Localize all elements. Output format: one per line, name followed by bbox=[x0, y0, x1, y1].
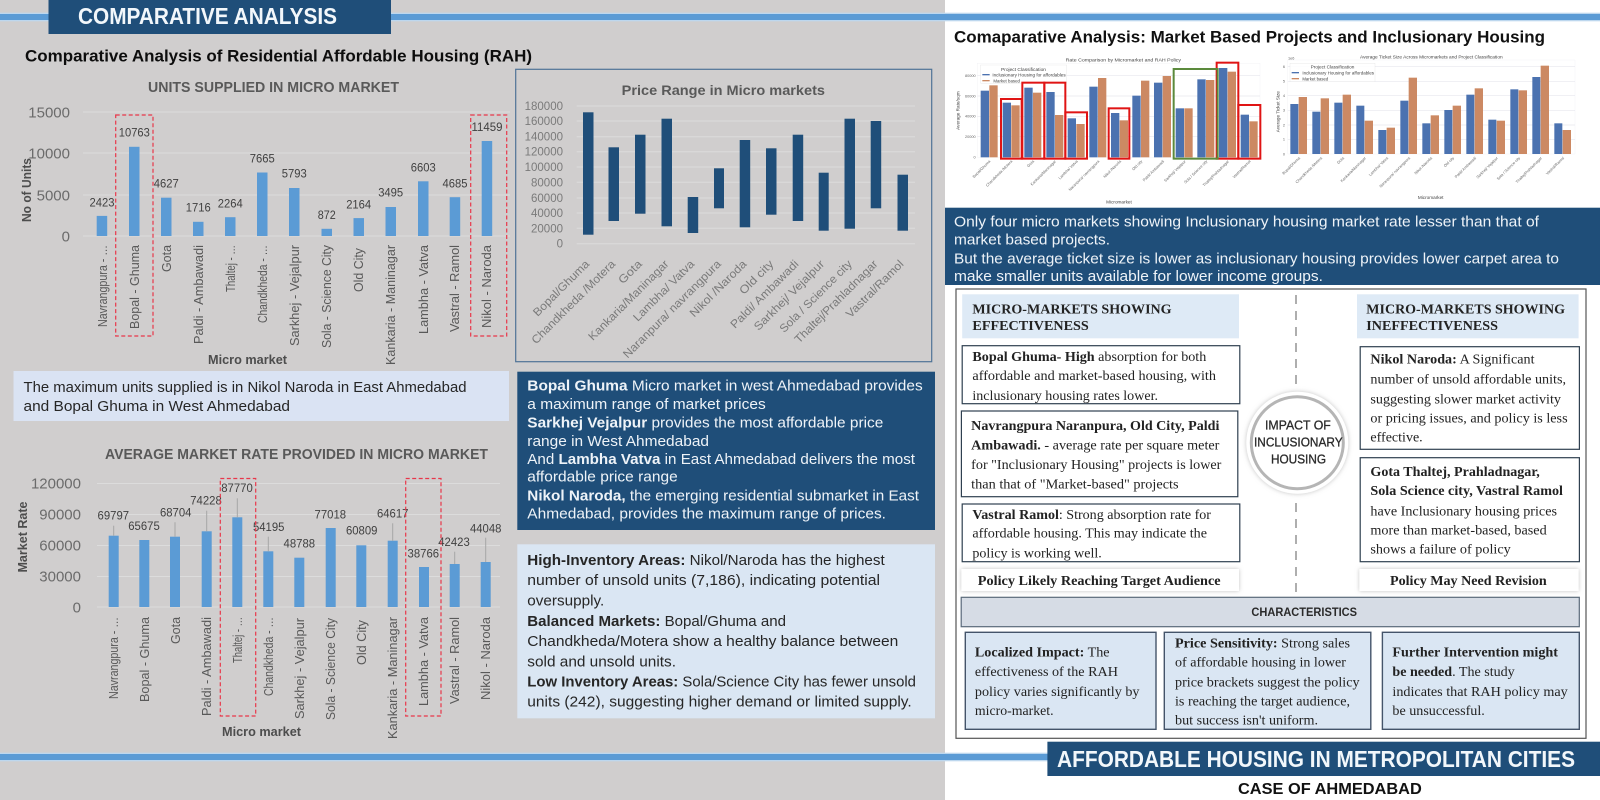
text box: Bopal Ghuma bbox=[962, 346, 1240, 404]
panel: price range chart: 0 bbox=[557, 239, 563, 251]
bar chart: units supplied in micro market: 1716 bbox=[186, 202, 211, 214]
bar chart: average market rate: Paldi - Ambawadi bbox=[200, 617, 214, 716]
heading: ineffectiveness: INEFFECTIVENESS bbox=[1366, 318, 1498, 333]
heading: effectiveness: EFFECTIVENESS bbox=[972, 318, 1089, 333]
card: further intervention bbox=[1382, 632, 1579, 729]
chart: rate comparison by micromarket: 0 bbox=[974, 156, 976, 160]
panel: price range findings: Bopal Ghuma Micro market in west Ahmedabad provides bbox=[527, 378, 923, 394]
bar chart: units supplied in micro market: 6603 bbox=[411, 162, 436, 174]
chart: rate comparison by micromarket: 40000 bbox=[965, 115, 976, 119]
chart: average ticket size: Market based bbox=[1302, 76, 1329, 81]
panel: price range chart: Sarkhej/ Vejalpur bbox=[752, 258, 827, 333]
chart: average ticket size: 4 bbox=[1283, 94, 1286, 98]
panel: inventory findings: sold and unsold units. bbox=[527, 654, 676, 670]
bar chart: average market rate: 48788 bbox=[284, 538, 315, 550]
bar chart: average market rate: 74228 bbox=[190, 496, 222, 508]
chart: rate comparison by micromarket: Average Rate/sqm bbox=[955, 91, 960, 130]
panel: price range findings: Nikol Naroda, the emerging residential submarket in East bbox=[527, 489, 919, 505]
text box: Nikol Naroda bbox=[1360, 347, 1579, 449]
panel: market based vs inclusionary summary: market based projects. bbox=[954, 232, 1110, 248]
bar chart: units supplied in micro market: 872 bbox=[318, 210, 336, 222]
card: price sensitivity: but success isn't uniform. bbox=[1175, 712, 1318, 727]
bar chart: average market rate: 30000 bbox=[39, 568, 81, 586]
bar chart: average market rate: 65675 bbox=[128, 521, 160, 533]
heading: effectiveness bbox=[962, 294, 1239, 338]
chart: rate comparison by micromarket: 20000 bbox=[965, 135, 976, 139]
chart: rate comparison by micromarket: Lambha/ Vatva bbox=[1058, 159, 1079, 180]
bar chart: average market rate: 90000 bbox=[39, 506, 81, 524]
bar chart: units supplied in micro market: No of Units bbox=[20, 158, 34, 222]
card: price sensitivity: Price Sensitivity: Strong sales bbox=[1175, 635, 1350, 650]
panel: inventory findings: High-Inventory Areas: Nikol/Naroda has the highest bbox=[527, 553, 885, 569]
chart: rate comparison by micromarket: Project Classification bbox=[1001, 67, 1046, 72]
panel: price range chart: Lambha/ Vatva bbox=[631, 258, 698, 324]
panel: price range chart: 40000 bbox=[531, 208, 563, 220]
bar chart: average market rate: 38766 bbox=[408, 549, 439, 561]
bar chart: units supplied in micro market: Old City bbox=[352, 247, 366, 292]
chart: average ticket size: 6 bbox=[1283, 65, 1285, 69]
card: further intervention: be unsuccessful. bbox=[1392, 703, 1485, 718]
bar chart: units supplied in micro market: Lambha - Vatva bbox=[417, 245, 431, 334]
bar chart: units supplied in micro market: 5000 bbox=[37, 188, 70, 204]
bar chart: units supplied in micro market: Paldi - Ambawadi bbox=[192, 245, 206, 344]
chart: rate comparison by micromarket: Naranpura/ navrangpura bbox=[1068, 159, 1101, 192]
card: price sensitivity bbox=[1164, 632, 1371, 729]
chart: rate comparison by micromarket: Old city bbox=[1132, 159, 1143, 171]
panel: inventory findings bbox=[517, 544, 935, 718]
panel: price range chart: 20000 bbox=[531, 223, 563, 235]
chart: rate comparison by micromarket: Market based bbox=[993, 78, 1020, 83]
bar chart: average market rate: Vastral - Ramol bbox=[448, 617, 462, 704]
text box: Bopal Ghuma: affordable and market-based housing, with bbox=[972, 368, 1216, 383]
center circle: impact of inclusionary housing: IMPACT OF bbox=[1265, 417, 1331, 432]
panel: price range chart: Kankaria/Maninagar bbox=[587, 258, 672, 343]
card: price sensitivity: price brackets suggest the policy bbox=[1175, 675, 1360, 690]
bar chart: units supplied in micro market: 4627 bbox=[154, 178, 179, 190]
panel: price range chart: 180000 bbox=[525, 101, 563, 113]
text box: Gota Thaltej: Sola Science city, Vastral Ramol bbox=[1370, 483, 1563, 498]
bar chart: units supplied in micro market: 4685 bbox=[442, 178, 468, 190]
footer subtitle: CASE OF AHMEDABAD bbox=[1238, 781, 1422, 798]
panel: inventory findings: number of unsold units (7,186), indicating potential bbox=[527, 573, 880, 589]
chart: average ticket size: Gota bbox=[1336, 156, 1346, 165]
bar chart: units supplied in micro market: 11459 bbox=[472, 122, 502, 134]
panel: price range chart: Paldi/ Ambawadi bbox=[729, 258, 801, 331]
text box: Navrangpura Naranpura: for "Inclusionary Housing" projects is lower bbox=[971, 457, 1222, 472]
text box: Vastral Ramol: policy is working well. bbox=[972, 546, 1102, 561]
bar chart: average market rate: Lambha - Vatva bbox=[417, 617, 431, 706]
chart: rate comparison by micromarket: Micromarket bbox=[1106, 199, 1133, 204]
text box: Navrangpura Naranpura: than that of "Market-based" projects bbox=[971, 476, 1179, 491]
bar chart: average market rate: Kankaria - Maninagar bbox=[386, 617, 400, 739]
bar chart: average market rate: Navrangpura - … bbox=[107, 617, 121, 699]
text box: Navrangpura Naranpura bbox=[961, 411, 1238, 497]
panel: price range chart: Naranpura/ navrangpura bbox=[621, 258, 724, 361]
chart: average ticket size: Bopal/Ghuma bbox=[1282, 156, 1302, 176]
bar chart: units supplied in micro market: Bopal - Ghuma bbox=[128, 245, 142, 329]
bar chart: average market rate bbox=[16, 447, 501, 739]
panel: price range findings bbox=[517, 372, 935, 530]
panel: inventory findings: Chandkheda/Motera show a healthy balance between bbox=[527, 634, 898, 650]
chart: average ticket size bbox=[1275, 55, 1575, 200]
card: further intervention: Further Intervention might bbox=[1392, 645, 1559, 660]
panel: price range chart: Gota bbox=[617, 258, 645, 287]
text box: Navrangpura Naranpura: Navrangpura Naranpura, Old City, Paldi bbox=[971, 418, 1220, 433]
panel: price range chart: Bopal/Ghuma bbox=[531, 258, 593, 319]
heading bar: characteristics bbox=[961, 597, 1579, 627]
chart: rate comparison by micromarket: Vastral/Ramol bbox=[1232, 159, 1252, 179]
panel: market based vs inclusionary summary bbox=[945, 208, 1600, 285]
chart: average ticket size: Average Ticket Size Across Micromarkets and Project Classification bbox=[1360, 55, 1503, 60]
bar chart: units supplied in micro market: Vastral - Ramol bbox=[448, 245, 462, 332]
text box: Nikol Naroda: Nikol Naroda: A Significant bbox=[1370, 352, 1535, 367]
text box: Gota Thaltej: more than market-based, based bbox=[1370, 522, 1547, 537]
panel: inventory findings: oversupply. bbox=[527, 593, 604, 609]
text box: Gota Thaltej: Gota Thaltej, Prahladnagar, bbox=[1370, 464, 1540, 479]
panel: price range chart: Old city bbox=[738, 258, 777, 297]
bar chart: average market rate: AVERAGE MARKET RATE PROVIDED IN MICRO MARKET bbox=[105, 447, 488, 463]
panel: price range findings: Sarkhej Vejalpur provides the most affordable price bbox=[527, 416, 883, 432]
panel: price range chart: 140000 bbox=[525, 132, 563, 144]
bar chart: units supplied in micro market: 2164 bbox=[346, 199, 372, 211]
panel: price range chart: 120000 bbox=[525, 147, 563, 159]
bar chart: average market rate: 60809 bbox=[346, 525, 377, 537]
card: price sensitivity: is reaching the target audience, bbox=[1175, 694, 1350, 709]
panel: price range chart: 160000 bbox=[525, 116, 563, 128]
callout: maximum units supplied: and Bopal Ghuma in West Ahmedabad bbox=[24, 399, 290, 415]
text box: Nikol Naroda: suggesting slower market activity bbox=[1370, 391, 1561, 406]
chart: average ticket size: Average Ticket Size bbox=[1275, 91, 1280, 132]
heading: effectiveness: MICRO-MARKETS SHOWING bbox=[972, 301, 1172, 316]
chart: average ticket size: Sarkhej/ Vejalpur bbox=[1476, 156, 1500, 180]
label: policy likely reaching target audience bbox=[961, 569, 1239, 591]
chart: rate comparison by micromarket: Nikol /Naroda bbox=[1103, 159, 1123, 179]
bar chart: average market rate: 60000 bbox=[39, 538, 81, 554]
panel: inventory findings: Low Inventory Areas: Sola/Science City has fewer unsold bbox=[527, 675, 916, 691]
right heading: Comaparative Analysis: Market Based Projects and Inclusionary Housing bbox=[954, 28, 1545, 46]
card: localized impact: Localized Impact: The bbox=[975, 645, 1110, 660]
bar chart: units supplied in micro market: Sola - Science City bbox=[320, 244, 334, 348]
bar chart: average market rate: Thaltej - … bbox=[231, 617, 245, 663]
card: further intervention: indicates that RAH policy may bbox=[1392, 684, 1568, 699]
bar chart: average market rate: 44048 bbox=[470, 523, 501, 535]
heading bar: characteristics: CHARACTERISTICS bbox=[1251, 605, 1357, 619]
label: policy may need revision: Policy May Need Revision bbox=[1390, 573, 1547, 588]
bar chart: units supplied in micro market: 2423 bbox=[90, 197, 114, 209]
panel: price range chart bbox=[516, 69, 932, 362]
chart: average ticket size: Micromarket bbox=[1418, 195, 1444, 200]
card: localized impact bbox=[965, 632, 1156, 729]
bar chart: units supplied in micro market: 2264 bbox=[218, 198, 243, 210]
bar chart: average market rate: Old City bbox=[355, 619, 369, 665]
panel: inventory findings: units (242), suggesting higher demand or limited supply. bbox=[527, 695, 912, 711]
bar chart: average market rate: 69797 bbox=[98, 511, 129, 523]
panel: market based vs inclusionary summary: make smaller units available for lower income groups. bbox=[954, 269, 1323, 285]
bar chart: average market rate: 77018 bbox=[315, 510, 346, 522]
bar chart: units supplied in micro market: Gota bbox=[160, 245, 174, 272]
chart: average ticket size: 3 bbox=[1283, 109, 1285, 113]
text box: Gota Thaltej: have Inclusionary housing prices bbox=[1370, 504, 1557, 519]
callout: maximum units supplied: The maximum units supplied is in Nikol Naroda in East Ahmedabad bbox=[24, 380, 466, 396]
card: price sensitivity: of affordable housing in lower bbox=[1175, 655, 1347, 670]
chart: rate comparison by micromarket: Sola / Science city bbox=[1183, 159, 1208, 184]
bar chart: average market rate: Nikol - Naroda bbox=[479, 617, 493, 700]
panel: market based vs inclusionary summary: Only four micro markets showing Inclusionary housing market rate lesser than that of bbox=[954, 215, 1540, 231]
text box: Nikol Naroda: or pricing issues, and policy is less bbox=[1370, 410, 1568, 425]
bar chart: average market rate: Market Rate bbox=[16, 501, 30, 572]
card: localized impact: micro-market. bbox=[975, 703, 1054, 718]
panel: inventory findings: Balanced Markets: Bopal/Ghuma and bbox=[527, 614, 786, 630]
panel: price range findings: And Lambha Vatva in East Ahmedabad delivers the most bbox=[527, 452, 915, 468]
bar chart: units supplied in micro market: Sarkhej - Vejalpur bbox=[288, 245, 302, 346]
panel: price range chart: 100000 bbox=[525, 162, 563, 174]
bar chart: units supplied in micro market: Navrangpura - … bbox=[96, 245, 110, 327]
panel: price range chart: Thaltej/Prahladnagar bbox=[793, 258, 881, 346]
chart: average ticket size: 1 bbox=[1283, 138, 1285, 142]
panel: price range chart: Nikol /Naroda bbox=[688, 258, 750, 320]
panel: price range chart: Price Range in Micro markets bbox=[622, 82, 825, 98]
bar chart: units supplied in micro market bbox=[20, 80, 510, 367]
top rule bbox=[0, 13, 1600, 21]
bar chart: average market rate: Micro market bbox=[222, 725, 302, 739]
chart: rate comparison by micromarket: Inclusionary Housing for affordables bbox=[992, 73, 1066, 78]
callout: maximum units supplied bbox=[14, 371, 509, 421]
panel: market based vs inclusionary summary: But the average ticket size is lower as inclusionary housing provides lower carpet area to bbox=[954, 251, 1559, 267]
panel: price range chart: 60000 bbox=[531, 193, 563, 205]
chart: average ticket size: Chandkheda /Motera bbox=[1295, 156, 1324, 184]
text box: Bopal Ghuma: inclusionary housing rates lower. bbox=[972, 388, 1158, 403]
bar chart: units supplied in micro market: 15000 bbox=[28, 104, 70, 122]
center circle: impact of inclusionary housing: HOUSING bbox=[1271, 451, 1326, 466]
text box: Navrangpura Naranpura: Ambawadi. - average rate per square meter bbox=[971, 437, 1220, 452]
chart: average ticket size: Vastral/Ramol bbox=[1545, 156, 1565, 176]
label: policy likely reaching target audience: Policy Likely Reaching Target Audience bbox=[978, 573, 1221, 588]
chart: average ticket size: 5 bbox=[1283, 80, 1285, 84]
bar chart: units supplied in micro market: Chandkheda - … bbox=[256, 245, 270, 323]
chart: rate comparison by micromarket: Kankaria/Maninagar bbox=[1030, 159, 1058, 187]
chart: rate comparison by micromarket: Gota bbox=[1026, 159, 1036, 168]
bar chart: units supplied in micro market: Kankaria - Maninagar bbox=[384, 245, 398, 365]
heading: ineffectiveness bbox=[1357, 294, 1579, 338]
panel: price range findings: range in West Ahmedabad bbox=[527, 434, 709, 450]
bar chart: average market rate: Sarkhej - Vejalpur bbox=[293, 618, 307, 719]
chart: rate comparison by micromarket: Paldi/ Ambawadi bbox=[1142, 159, 1165, 182]
center circle: impact of inclusionary housing: INCLUSIONARY bbox=[1254, 435, 1343, 450]
bar chart: average market rate: 0 bbox=[73, 600, 81, 616]
bar chart: units supplied in micro market: Thaltej - … bbox=[224, 245, 238, 292]
bar chart: average market rate: Sola - Science City bbox=[324, 617, 338, 720]
chart: average ticket size: Old city bbox=[1443, 156, 1455, 168]
bar chart: units supplied in micro market: 3495 bbox=[378, 188, 403, 200]
panel: price range chart: 80000 bbox=[531, 177, 563, 189]
section banner: comparative analysis bbox=[48, 0, 391, 34]
panel: price range chart: Chandkheda /Motera bbox=[530, 258, 619, 347]
chart: rate comparison by micromarket: Rate Comparison by Micromarket and RAH Policy bbox=[1066, 57, 1182, 62]
chart: average ticket size: 1e6 bbox=[1288, 56, 1294, 60]
bottom rule bbox=[0, 753, 1048, 761]
panel: price range findings: Ahmedabad, provides the maximum range of prices. bbox=[527, 507, 886, 523]
card: localized impact: policy varies significantly by bbox=[975, 684, 1140, 699]
chart: average ticket size: Project Classification bbox=[1311, 64, 1355, 69]
text box: Nikol Naroda: effective. bbox=[1370, 430, 1423, 445]
bar chart: average market rate: 87770 bbox=[221, 483, 253, 495]
bar chart: average market rate: Bopal - Ghuma bbox=[138, 617, 152, 702]
chart: rate comparison by micromarket: 60000 bbox=[965, 94, 976, 98]
bar chart: units supplied in micro market: 5793 bbox=[282, 169, 307, 181]
bar chart: units supplied in micro market: 0 bbox=[62, 228, 70, 246]
text box: Gota Thaltej bbox=[1360, 458, 1579, 562]
bar chart: units supplied in micro market: UNITS SUPPLIED IN MICRO MARKET bbox=[148, 80, 399, 96]
bar chart: units supplied in micro market: 7665 bbox=[250, 154, 275, 166]
chart: rate comparison by micromarket: Bopal/Ghuma bbox=[972, 159, 992, 179]
text box: Vastral Ramol bbox=[962, 504, 1240, 562]
text box: Bopal Ghuma: Bopal Ghuma- High absorption for both bbox=[972, 349, 1207, 364]
bar chart: average market rate: 68704 bbox=[160, 507, 192, 519]
panel: price range findings: a maximum range of market prices bbox=[527, 397, 766, 413]
chart: average ticket size: Nikol /Naroda bbox=[1414, 156, 1434, 175]
bar chart: average market rate: 42423 bbox=[438, 537, 470, 549]
panel: price range findings: affordable price range bbox=[527, 470, 678, 486]
chart: average ticket size: Paldi/ Ambawadi bbox=[1454, 156, 1477, 179]
bar chart: units supplied in micro market: Nikol - Naroda bbox=[480, 245, 494, 328]
text box: Gota Thaltej: shows a failure of policy bbox=[1370, 541, 1511, 556]
chart: rate comparison by micromarket: Chandkheda /Motera bbox=[985, 159, 1014, 188]
card: localized impact: effectiveness of the RAH bbox=[975, 664, 1118, 679]
chart: rate comparison by micromarket: Thaltej/Prahladnagar bbox=[1202, 159, 1231, 188]
bar chart: units supplied in micro market: 10000 bbox=[28, 146, 70, 162]
chart: rate comparison by micromarket bbox=[955, 57, 1260, 204]
chart: average ticket size: Sola / Science city bbox=[1496, 156, 1521, 181]
chart: average ticket size: Lambha/ Vatva bbox=[1368, 156, 1390, 177]
chart: rate comparison by micromarket: Sarkhej/ Vejalpur bbox=[1163, 159, 1187, 183]
chart: average ticket size: 0 bbox=[1283, 152, 1285, 156]
chart: average ticket size: Thaltej/Prahladnagar bbox=[1515, 156, 1544, 184]
heading: ineffectiveness: MICRO-MARKETS SHOWING bbox=[1366, 301, 1566, 316]
chart: average ticket size: Kankaria/Maninagar bbox=[1340, 156, 1368, 183]
label: policy may need revision bbox=[1359, 569, 1579, 591]
bar chart: units supplied in micro market: Micro market bbox=[208, 353, 288, 367]
card: further intervention: be needed. The study bbox=[1392, 664, 1515, 679]
chart: average ticket size: 2 bbox=[1283, 123, 1285, 127]
chart: average ticket size: Inclusionary Housing for affordables bbox=[1302, 70, 1375, 75]
bar chart: average market rate: Chandkheda - … bbox=[262, 617, 276, 696]
bar chart: average market rate: 54195 bbox=[253, 522, 284, 534]
left page background bbox=[0, 0, 945, 800]
right page background bbox=[945, 0, 1600, 800]
panel: price range chart: Sola / Science city bbox=[778, 258, 855, 335]
text box: Nikol Naroda: number of unsold affordable units, bbox=[1370, 371, 1566, 386]
bar chart: average market rate: Gota bbox=[169, 617, 183, 644]
bar chart: units supplied in micro market: 10763 bbox=[119, 127, 150, 139]
section banner: comparative analysis: COMPARATIVE ANALYSIS bbox=[78, 3, 337, 29]
bar chart: average market rate: 64617 bbox=[377, 508, 408, 520]
panel: price range chart: Vastral/Ramol bbox=[844, 258, 906, 321]
chart: rate comparison by micromarket: 80000 bbox=[965, 74, 976, 78]
text box: Vastral Ramol: affordable housing. This may indicate the bbox=[972, 526, 1207, 541]
left heading: Comparative Analysis of Residential Affordable Housing (RAH) bbox=[25, 48, 532, 66]
panel: impact of inclusionary housing bbox=[956, 289, 1586, 738]
center circle: impact of inclusionary housing bbox=[1246, 392, 1348, 494]
text box: Vastral Ramol: Vastral Ramol: Strong absorption rate for bbox=[972, 507, 1212, 522]
chart: average ticket size: Naranpura/ navrangpura bbox=[1379, 156, 1412, 189]
bar chart: average market rate: 120000 bbox=[31, 476, 81, 492]
